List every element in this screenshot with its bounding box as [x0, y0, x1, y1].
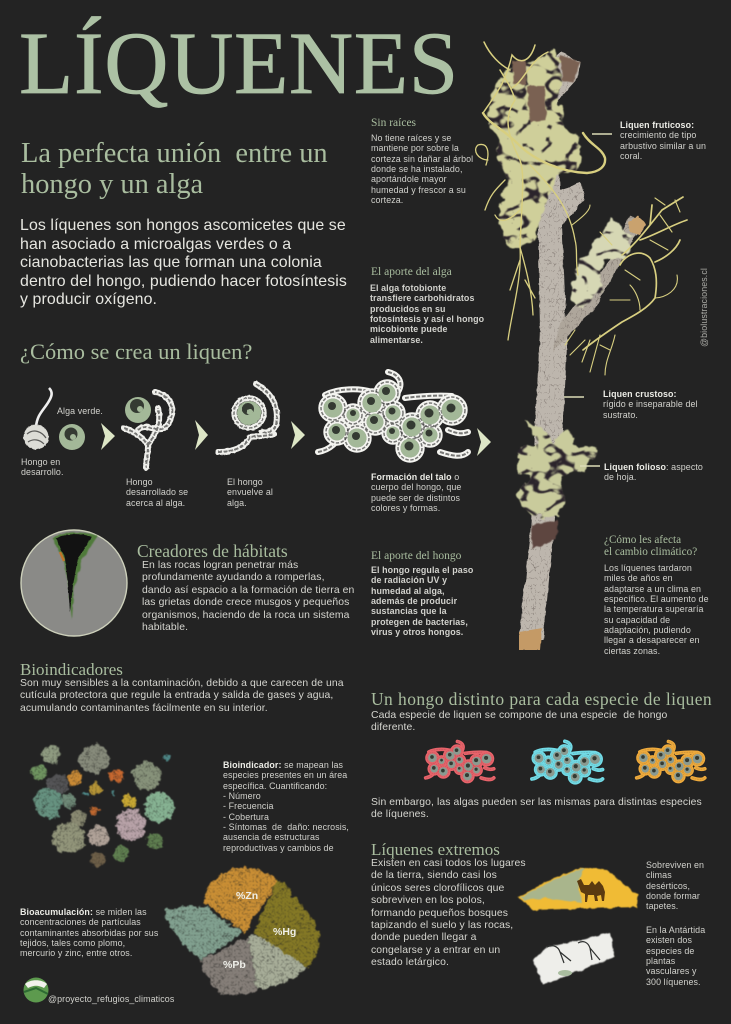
- text: sin embargo: Sin embargo, las algas pueden ser las mismas para distintas especies: [371, 797, 702, 808]
- text: aporte del alga: El alga fotobionte: [370, 283, 446, 293]
- text: liquenes extremos: Existen en casi todos los lugares: [371, 858, 526, 869]
- text: bioindicadores: acumulando contaminantes fácilmente en su interior.: [20, 703, 268, 714]
- label: fruticoso: crecimiento de tipo: [620, 130, 696, 140]
- metal labels: %Pb: [223, 959, 246, 971]
- antarctic lichen patch with penguins: [533, 933, 615, 985]
- text: liquenes extremos: estado letárgico.: [371, 957, 449, 968]
- alga cerca del hongo: [125, 397, 151, 423]
- text: bioacumulacion: Bioacumulación: se miden las: [20, 907, 147, 917]
- text: envuelve al: [227, 487, 273, 497]
- label: folioso: [604, 462, 703, 482]
- text: cambio climatico: miles de años en: [604, 573, 673, 583]
- text: creadores de habitats: [142, 560, 354, 633]
- text: desierto: Sobreviven en: [646, 860, 704, 870]
- text: antartida: [646, 925, 706, 987]
- text: liquenes extremos: de la tierra, siendo casi los: [371, 870, 497, 881]
- text: bioindicador: Bioindicador: se mapean las: [223, 760, 343, 770]
- text: sin raices: corteza sin dañar al árbol: [371, 154, 473, 164]
- caption: talo: cuerpo del hongo, que: [371, 482, 461, 492]
- text: aporte del hongo: además de producir: [371, 596, 457, 606]
- text: aporte del hongo: virus y otros hongos.: [371, 627, 463, 637]
- label: crustoso: rígido e inseparable del: [603, 399, 698, 409]
- text: creadores de habitats: profundamente ayudando a romperlas,: [142, 572, 325, 583]
- text: aporte del alga: fotosíntesis y así el hongo: [370, 314, 484, 324]
- metal labels: %Hg: [273, 926, 296, 938]
- intro paragraph: Los líquenes son hongos ascomicetes que se: [20, 217, 346, 234]
- step captions: [21, 406, 273, 508]
- text: desierto: [646, 860, 704, 911]
- rock crack circle: [21, 530, 127, 636]
- text: bioindicador: - Número: [223, 791, 261, 801]
- text: El hongo: [227, 477, 263, 487]
- text: bioindicador: - Cobertura: [223, 812, 269, 822]
- heading: creadores de habitats: Creadores de hábitats: [137, 541, 288, 561]
- text: liquenes extremos: [371, 858, 526, 968]
- text: bioindicadores: [20, 678, 344, 714]
- text: creadores de habitats: organismos, haciendo de la roca un sistema: [142, 610, 350, 621]
- heading: aporte del hongo: El aporte del hongo: [371, 550, 461, 562]
- text: cambio climatico: adaptarse a un clima en: [604, 584, 701, 594]
- label: crustoso: sustrato.: [603, 410, 638, 420]
- text: Alga verde.: [57, 406, 103, 416]
- subtitle: hongo y un alga: [21, 169, 203, 200]
- text: bioacumulacion: concentraciones de partículas: [20, 917, 141, 927]
- text: aporte del hongo: sustancias que la: [371, 606, 447, 616]
- text: aporte del alga: transfiere carbohidratos: [370, 293, 474, 303]
- text: creadores de habitats: las grietas donde crece musgos y pequeños: [142, 597, 349, 608]
- label: folioso: Liquen folioso: aspecto: [604, 462, 703, 472]
- text: cambio climatico: específico. El aumento de: [604, 594, 709, 604]
- text: cada especie: [371, 710, 667, 733]
- text: antartida: vasculares y: [646, 966, 697, 976]
- credit vertical: @biolustraciones.cl: [699, 268, 709, 347]
- subtitle: [21, 138, 328, 200]
- text: bioacumulacion: contaminantes absorbidas por sus: [20, 928, 158, 938]
- step 3: hongo envuelve al alga: [218, 384, 277, 452]
- text: cada especie: diferente.: [371, 722, 415, 733]
- right branch lichen: [572, 218, 635, 310]
- caption: talo: [371, 472, 461, 513]
- arrows between steps: [101, 420, 491, 456]
- text: bioindicador: [223, 760, 349, 853]
- text: creadores de habitats: dando así espacio a la formación de tierra en: [142, 585, 354, 596]
- label: fruticoso: arbustivo similar a un: [620, 141, 706, 151]
- label: fruticoso: coral.: [620, 151, 642, 161]
- intro paragraph: y producir oxígeno.: [20, 291, 157, 308]
- step 1: hongo en desarrollo: [24, 388, 52, 450]
- text: cambio climatico: ciertas zonas.: [604, 646, 660, 656]
- heading: sin raices: Sin raíces: [371, 117, 416, 129]
- alga verde disc: [59, 424, 85, 450]
- step 2: hongo desarrollado: [124, 392, 172, 468]
- text: aporte del alga: micobionte puede: [370, 324, 448, 334]
- bark: trunk and branches: [510, 52, 646, 650]
- text: antartida: plantas: [646, 956, 675, 966]
- text: liquenes extremos: formando pequeños bosques: [371, 908, 508, 919]
- text: creadores de habitats: En las rocas logran penetrar más: [142, 560, 298, 571]
- heading: un hongo distinto: Un hongo distinto para cada especie de liquen: [371, 689, 712, 709]
- text: antartida: especies de: [646, 946, 694, 956]
- text: bioacumulacion: tejidos, tales como plomo,: [20, 938, 125, 948]
- text: alga.: [227, 498, 247, 508]
- colored thallus variants: [426, 741, 705, 783]
- text: sin raices: No tiene raíces y se: [371, 133, 451, 143]
- intro paragraph: dentro del hongo, pudiendo hacer fotosíntesis: [20, 273, 347, 290]
- heading: como se crea: ¿Cómo se crea un liquen?: [20, 339, 252, 364]
- connector lines: [564, 134, 612, 466]
- bioindicator lichen map: [31, 744, 174, 866]
- text: sin raices: corteza.: [371, 195, 403, 205]
- text: bioindicador: específica. Cuantificando:: [223, 781, 327, 791]
- intro paragraph: han asociado a microalgas verdes o a: [20, 236, 291, 253]
- text: liquenes extremos: donde pueden llegar a: [371, 932, 477, 943]
- text: sin raices: mantiene por sobre la: [371, 143, 459, 153]
- text: sin raices: donde se ha instalado,: [371, 164, 463, 174]
- metal labels: [223, 890, 296, 971]
- text: bioindicador: - Síntomas de daño: necrosis,: [223, 822, 349, 832]
- text: aporte del hongo: El hongo regula el paso: [371, 565, 473, 575]
- text: desierto: climas: [646, 870, 672, 880]
- text: liquenes extremos: únicos seres clorofílicos que: [371, 883, 504, 894]
- text: sin raices: [371, 133, 473, 205]
- caption: talo: colores y formas.: [371, 503, 440, 513]
- text: Hongo: [126, 477, 153, 487]
- desert lichen patch with camel: [518, 867, 638, 910]
- text: desarrollado se: [126, 487, 188, 497]
- text: antartida: existen dos: [646, 935, 692, 945]
- text: cambio climatico: Los líquenes tardaron: [604, 563, 692, 573]
- foliose lichen on trunk: [518, 420, 596, 518]
- text: bioindicador: - Frecuencia: [223, 801, 274, 811]
- text: cambio climatico: [604, 563, 709, 656]
- text: cada especie: Cada especie de liquen se compone de una especie de hongo: [371, 710, 667, 721]
- text: bioacumulacion: [20, 907, 158, 958]
- text: desierto: donde formar: [646, 891, 700, 901]
- yellow fruticose strands: [476, 42, 687, 375]
- text: aporte del hongo: de radiación UV y: [371, 575, 447, 585]
- text: aporte del alga: alimentarse.: [370, 335, 423, 345]
- heading: cambio climatico: el cambio climático?: [604, 546, 697, 558]
- text: aporte del hongo: humedad al alga,: [371, 586, 445, 596]
- heading: aporte del alga: El aporte del alga: [371, 266, 452, 278]
- intro paragraph: cianobacterias las que forman una colonia: [20, 254, 322, 271]
- text: creadores de habitats: habitable.: [142, 622, 188, 633]
- text: bioindicadores: Son muy sensibles a la contaminación, debido a que carecen de una: [20, 678, 344, 689]
- text: aporte del alga: [370, 283, 484, 345]
- heading: cambio climatico: ¿Cómo les afecta: [604, 534, 681, 546]
- heading: cambio climatico: [604, 534, 697, 558]
- text: sin embargo: [371, 797, 702, 820]
- text: sin raices: aportándole mayor: [371, 174, 447, 184]
- text: liquenes extremos: tapizando el suelo y las rocas,: [371, 920, 513, 931]
- text: cambio climatico: la temperatura superaría: [604, 604, 704, 614]
- metal labels: %Zn: [236, 890, 258, 902]
- text: antartida: 300 líquenes.: [646, 977, 701, 987]
- text: bioacumulacion: mercurio y zinc, entre otros.: [20, 948, 132, 958]
- label: crustoso: [603, 389, 698, 420]
- text: cambio climatico: llegar a desaparecer en: [604, 635, 700, 645]
- text: cambio climatico: su capacidad de: [604, 615, 670, 625]
- tree branch illustration: [476, 42, 687, 650]
- label: fruticoso: [620, 120, 706, 161]
- text: desierto: tapetes.: [646, 901, 678, 911]
- label: crustoso: Liquen crustoso:: [603, 389, 677, 399]
- text: sin raices: humedad y frescor a su: [371, 185, 466, 195]
- intro paragraph: [20, 217, 347, 308]
- title: LÍQUENES: [19, 15, 459, 113]
- text: bioindicador: ausencia de estructuras: [223, 832, 320, 842]
- step 4: talo: [318, 372, 468, 460]
- text: liquenes extremos: congelarse y a entrar en un: [371, 945, 500, 956]
- text: desarrollo.: [21, 467, 64, 477]
- text: cambio climatico: adaptación, pudiendo: [604, 625, 691, 635]
- subtitle: La perfecta unión entre un: [21, 138, 328, 169]
- text: aporte del hongo: [371, 565, 473, 637]
- text: bioindicador: especies presentes en un área: [223, 770, 347, 780]
- heading: bioindicadores: Bioindicadores: [20, 660, 123, 679]
- bioaccumulation lichen pie: [163, 868, 320, 995]
- label: folioso: de hoja.: [604, 472, 636, 482]
- heading: liquenes extremos: Líquenes extremos: [371, 840, 500, 859]
- text: liquenes extremos: sobreviven en los polos,: [371, 895, 485, 906]
- label: fruticoso: Liquen fruticoso:: [620, 120, 694, 130]
- text: acerca al alga.: [126, 498, 185, 508]
- caption: talo: puede ser de distintos: [371, 493, 460, 503]
- text: aporte del hongo: protegen de bacterias,: [371, 617, 468, 627]
- fruticose lichen mass (top): [487, 50, 582, 250]
- text: bioindicadores: cutícula protectora que regule la entrada y salida de gases y agua,: [20, 690, 333, 701]
- text: Hongo en: [21, 457, 60, 467]
- logo proyecto refugios climaticos: [24, 978, 48, 1002]
- caption: talo: Formación del talo o: [371, 472, 459, 482]
- text: sin embargo: de líquenes.: [371, 809, 429, 820]
- text: handle: @proyecto_refugios_climaticos: [48, 994, 174, 1004]
- text: aporte del alga: producidos en su: [370, 304, 446, 314]
- text: antartida: En la Antártida: [646, 925, 705, 935]
- text: desierto: desérticos,: [646, 881, 690, 891]
- text: bioindicador: reproductivas y cambios de: [223, 843, 334, 853]
